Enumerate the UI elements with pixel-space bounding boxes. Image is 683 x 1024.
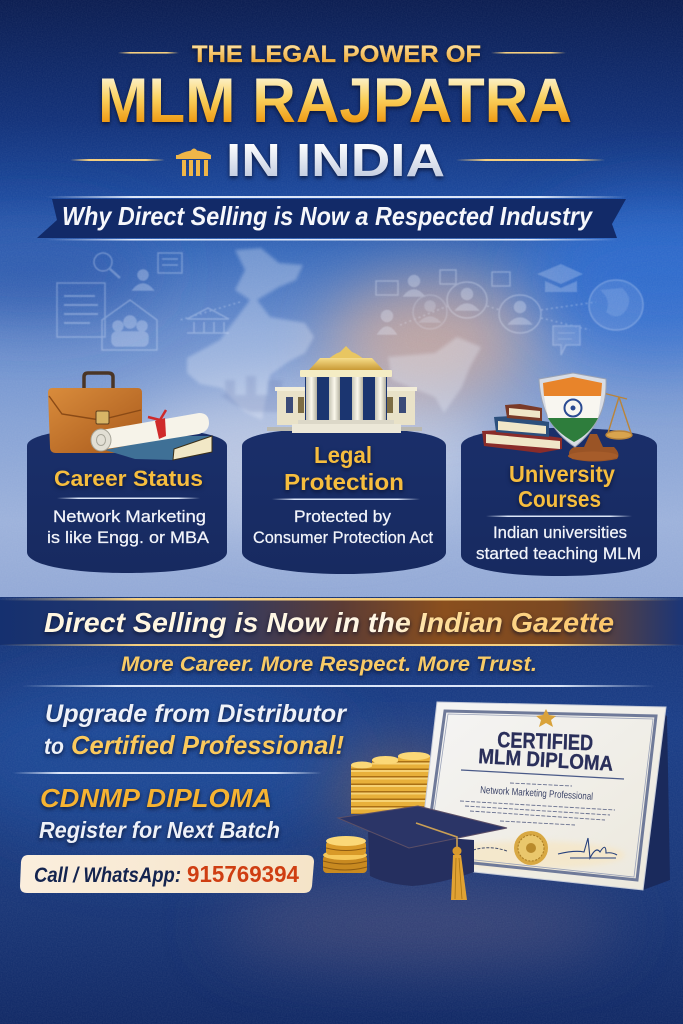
diploma fine print	[460, 783, 615, 825]
panel: university courses	[461, 373, 657, 576]
panel shape	[27, 428, 227, 573]
date line	[473, 848, 507, 851]
diploma heading: CERTIFIED	[497, 727, 594, 755]
easel back	[643, 712, 670, 890]
icon: parliament building	[176, 148, 211, 176]
paper	[418, 702, 666, 890]
heading	[284, 442, 404, 495]
heading: Career Status	[54, 466, 203, 491]
description: Protected by	[294, 507, 391, 526]
icon: magnifier	[94, 253, 120, 278]
description: is like Engg. or MBA	[47, 528, 210, 547]
icon: small boxes	[376, 270, 510, 295]
description: Network Marketing	[53, 507, 206, 526]
contact button: Call / WhatsApp:	[34, 864, 181, 887]
icon: chat bubble	[553, 326, 580, 355]
icon: gavel base	[568, 434, 618, 462]
cap body	[368, 832, 474, 886]
coin stacks	[323, 752, 430, 873]
icon: house with family	[102, 300, 157, 350]
icon: person standing	[378, 310, 396, 334]
icon: person circle two	[499, 295, 541, 333]
heading: Courses	[518, 486, 601, 512]
heading: Legal	[314, 442, 372, 468]
diploma certificate: MLM DIPLOMA	[478, 745, 614, 776]
icon: person left	[133, 270, 153, 290]
signature	[558, 838, 617, 858]
panel shape	[242, 428, 446, 574]
title line: in India: IN INDIA	[226, 134, 445, 186]
tall coin stack	[351, 752, 430, 814]
icon: India flag shield	[539, 373, 606, 447]
icon: gold star	[536, 709, 556, 727]
world and India map backdrop	[187, 248, 481, 420]
icon: scales of justice	[603, 393, 632, 439]
slogan: More Career. More Respect. More Trust.	[121, 653, 537, 676]
small coin stack	[323, 836, 367, 873]
description	[253, 507, 433, 547]
heading: Protection	[284, 469, 404, 495]
description	[476, 523, 641, 563]
icon: globe	[589, 280, 643, 330]
icon: book	[105, 436, 212, 460]
diploma certificate	[418, 702, 670, 890]
icon: small bank	[187, 308, 229, 333]
upgrade line: Upgrade from Distributor	[45, 700, 347, 728]
panel: legal protection	[242, 346, 446, 574]
gazette banner: Direct Selling is Now in the Indian Gazette	[44, 607, 614, 638]
gazette banner	[0, 598, 683, 646]
graduation cap	[338, 806, 507, 900]
gold seal	[514, 831, 548, 865]
panel: career status	[27, 373, 227, 573]
description: started teaching MLM	[476, 544, 641, 563]
diploma subtitle: Network Marketing Professional	[480, 785, 593, 803]
call to action text	[13, 700, 347, 843]
icon: group of people	[404, 276, 424, 296]
subtitle ribbon: Why Direct Selling is Now a Respected Industry	[62, 201, 593, 231]
description: Consumer Protection Act	[253, 528, 433, 547]
icon: government building	[267, 346, 422, 433]
description: Indian universities	[493, 523, 627, 542]
icon: briefcase	[48, 373, 142, 453]
certified line: to	[44, 733, 64, 759]
icon: graduation cap	[537, 264, 583, 292]
register line: Register for Next Batch	[39, 817, 280, 843]
icon: diploma scroll	[91, 410, 209, 451]
contact button: 915769394	[187, 861, 299, 887]
title line: the legal power of: THE LEGAL POWER OF	[192, 41, 481, 68]
faint network icons	[57, 253, 643, 355]
icon: document	[57, 283, 105, 337]
subtitle ribbon	[37, 196, 627, 240]
title line: MLM Rajpatra: MLM RAJPATRA	[98, 66, 572, 136]
CDNMP diploma: CDNMP DIPLOMA	[40, 783, 272, 813]
heading	[509, 461, 615, 512]
skyline haze	[220, 376, 300, 412]
certified line: Certified Professional!	[71, 730, 344, 760]
ornamental border	[425, 711, 656, 880]
icon: speech note	[158, 253, 182, 273]
title line: in India	[70, 134, 605, 186]
panel shape	[461, 428, 657, 576]
description	[47, 507, 210, 547]
icon: stack of books	[482, 404, 562, 453]
title	[70, 41, 605, 186]
contact button	[20, 855, 314, 893]
mortarboard	[338, 806, 507, 848]
icon: person circle one	[447, 282, 487, 318]
network links	[180, 302, 596, 330]
heading: University	[509, 461, 615, 487]
tassel	[416, 823, 457, 848]
icon: person circle three	[413, 295, 447, 329]
